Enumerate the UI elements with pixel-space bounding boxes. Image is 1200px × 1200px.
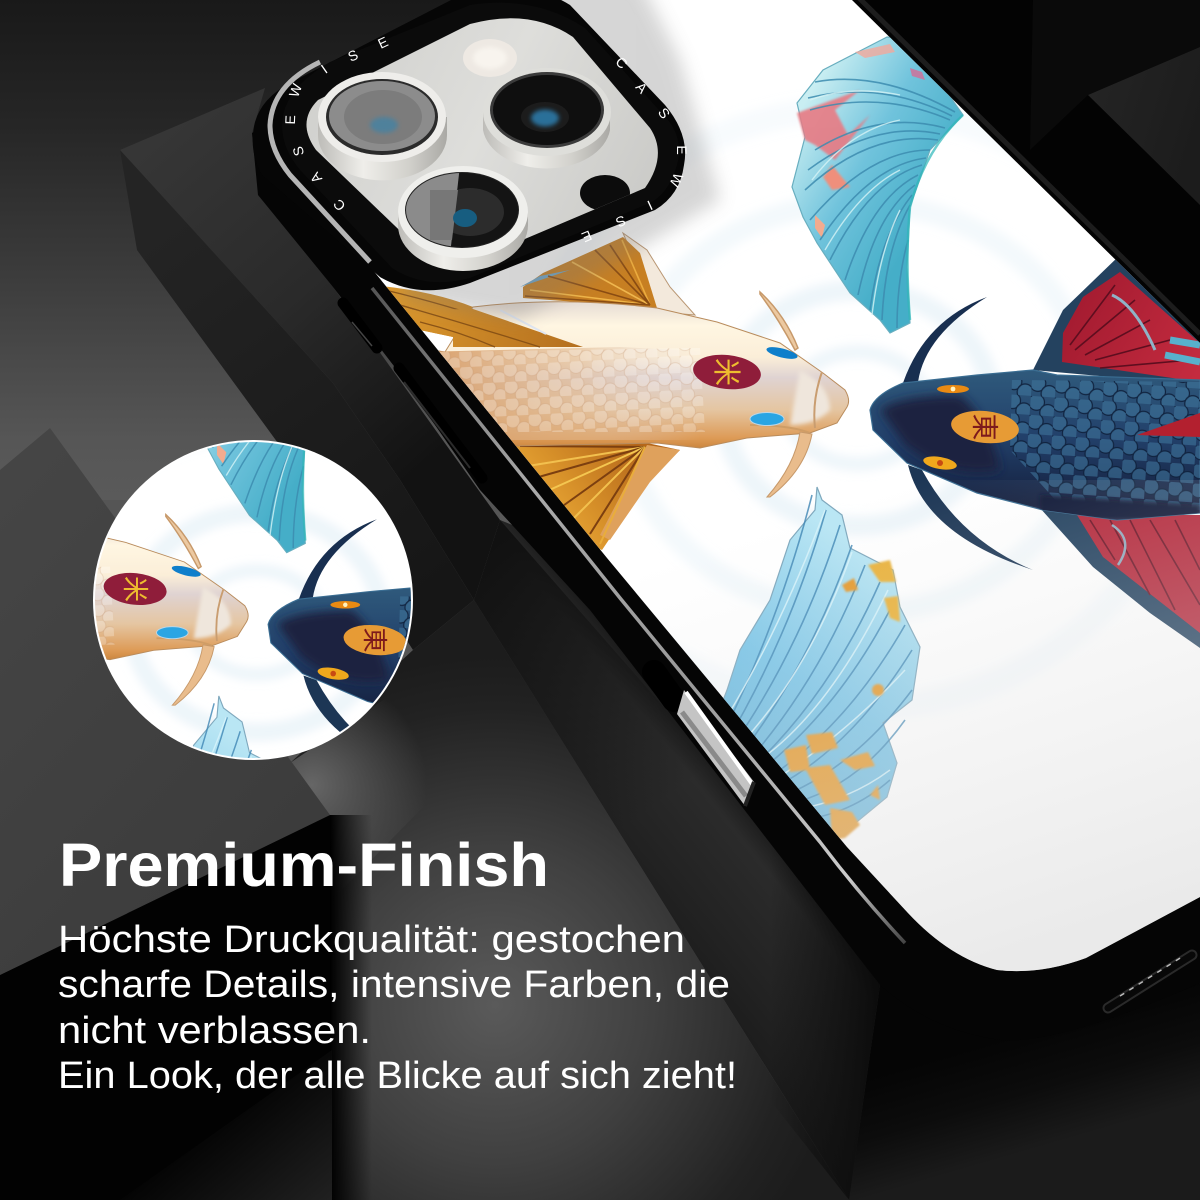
lens: top left [318,72,447,180]
fish: gold koi [370,233,849,550]
casewise lettering: W [286,81,305,99]
grey inner strip [270,62,370,262]
lidar sensor [580,175,630,211]
gold upper fin [520,233,695,315]
casewise lettering: S [289,145,307,158]
body text [58,919,737,1097]
dark whisker bottom [908,465,1033,570]
background: floor lower left fill [0,500,500,900]
top right frame edge [858,0,1200,334]
casewise lettering: S [614,212,628,231]
fish: dark koi [870,255,1200,648]
magnified artwork [95,442,411,758]
background: lower step top face [0,428,330,975]
casewise lettering: E [580,227,594,246]
bottom port [1108,955,1192,1008]
body text: Ein Look, der alle Blicke auf sich zieht! [58,1055,737,1097]
background: dark upper blocks [852,0,1200,400]
casewise lettering: I [645,197,655,214]
flash [463,39,517,77]
casewise lettering: S [655,105,673,122]
camera bump [253,0,690,290]
blue fin: bottom [700,487,920,840]
body text: scharfe Details, intensive Farben, die [58,964,730,1006]
side button: silver [654,672,754,806]
heading: Premium-Finish [59,831,549,899]
casewise lettering [282,33,690,246]
phone body [252,0,1200,1040]
red spot [691,352,763,392]
black branded ring [282,3,679,282]
small red fin [1137,413,1200,437]
gold whisker bottom [767,432,812,497]
casewise lettering: C [330,196,349,214]
red spot: 米 [708,358,748,386]
background: bright floor corner [290,680,430,900]
casewise lettering: S [345,46,361,65]
frame highlight along left edge [372,288,905,943]
background: band top shading [474,520,780,898]
lens: top right [483,68,611,169]
orange spots [784,560,900,840]
gold eyes [750,345,799,426]
gold tail fin [386,286,472,337]
blue fin: top [792,37,963,333]
casewise lettering: A [633,79,651,97]
background: dark band beside phone [474,520,1200,1200]
orange spot [950,408,1020,446]
dark upper fin [1033,255,1200,385]
gold whisker top [760,292,798,350]
casewise lettering: E [674,145,690,155]
gold lower fin [500,440,680,550]
casewise lettering: E [282,115,298,125]
background: contact shadow left fade [770,840,880,1200]
side button: long [399,368,482,478]
gold body [400,302,849,448]
dark whisker top [903,297,987,383]
body text: Höchste Druckqualität: gestochen [58,919,685,961]
background: central plinth side face [120,150,474,650]
background: block top right face [1088,47,1200,205]
background: phone contact shadow [849,983,1200,1200]
screen tone overlay [400,0,1200,980]
body text: nicht verblassen. [58,1010,371,1052]
camera window [306,18,658,262]
dark eyes [922,385,969,472]
casewise lettering: A [306,169,325,186]
casewise lettering: W [666,171,687,190]
bump outer frame [253,0,685,290]
background: lit floor [290,600,849,1200]
background: central plinth top face [120,88,500,600]
background: lower step black front [0,815,372,1200]
lens: bottom [395,165,530,271]
water ripples [528,108,1188,708]
dark lower fin [1040,508,1200,648]
casewise lettering: I [318,61,330,77]
inset circle: magnified detail [93,440,413,760]
screen artwork [300,0,1200,990]
dark body [870,370,1200,520]
casewise lettering: C [612,54,631,72]
side button: small [343,303,377,348]
orange spot: 東 [967,414,1006,440]
casewise lettering: E [375,33,391,52]
